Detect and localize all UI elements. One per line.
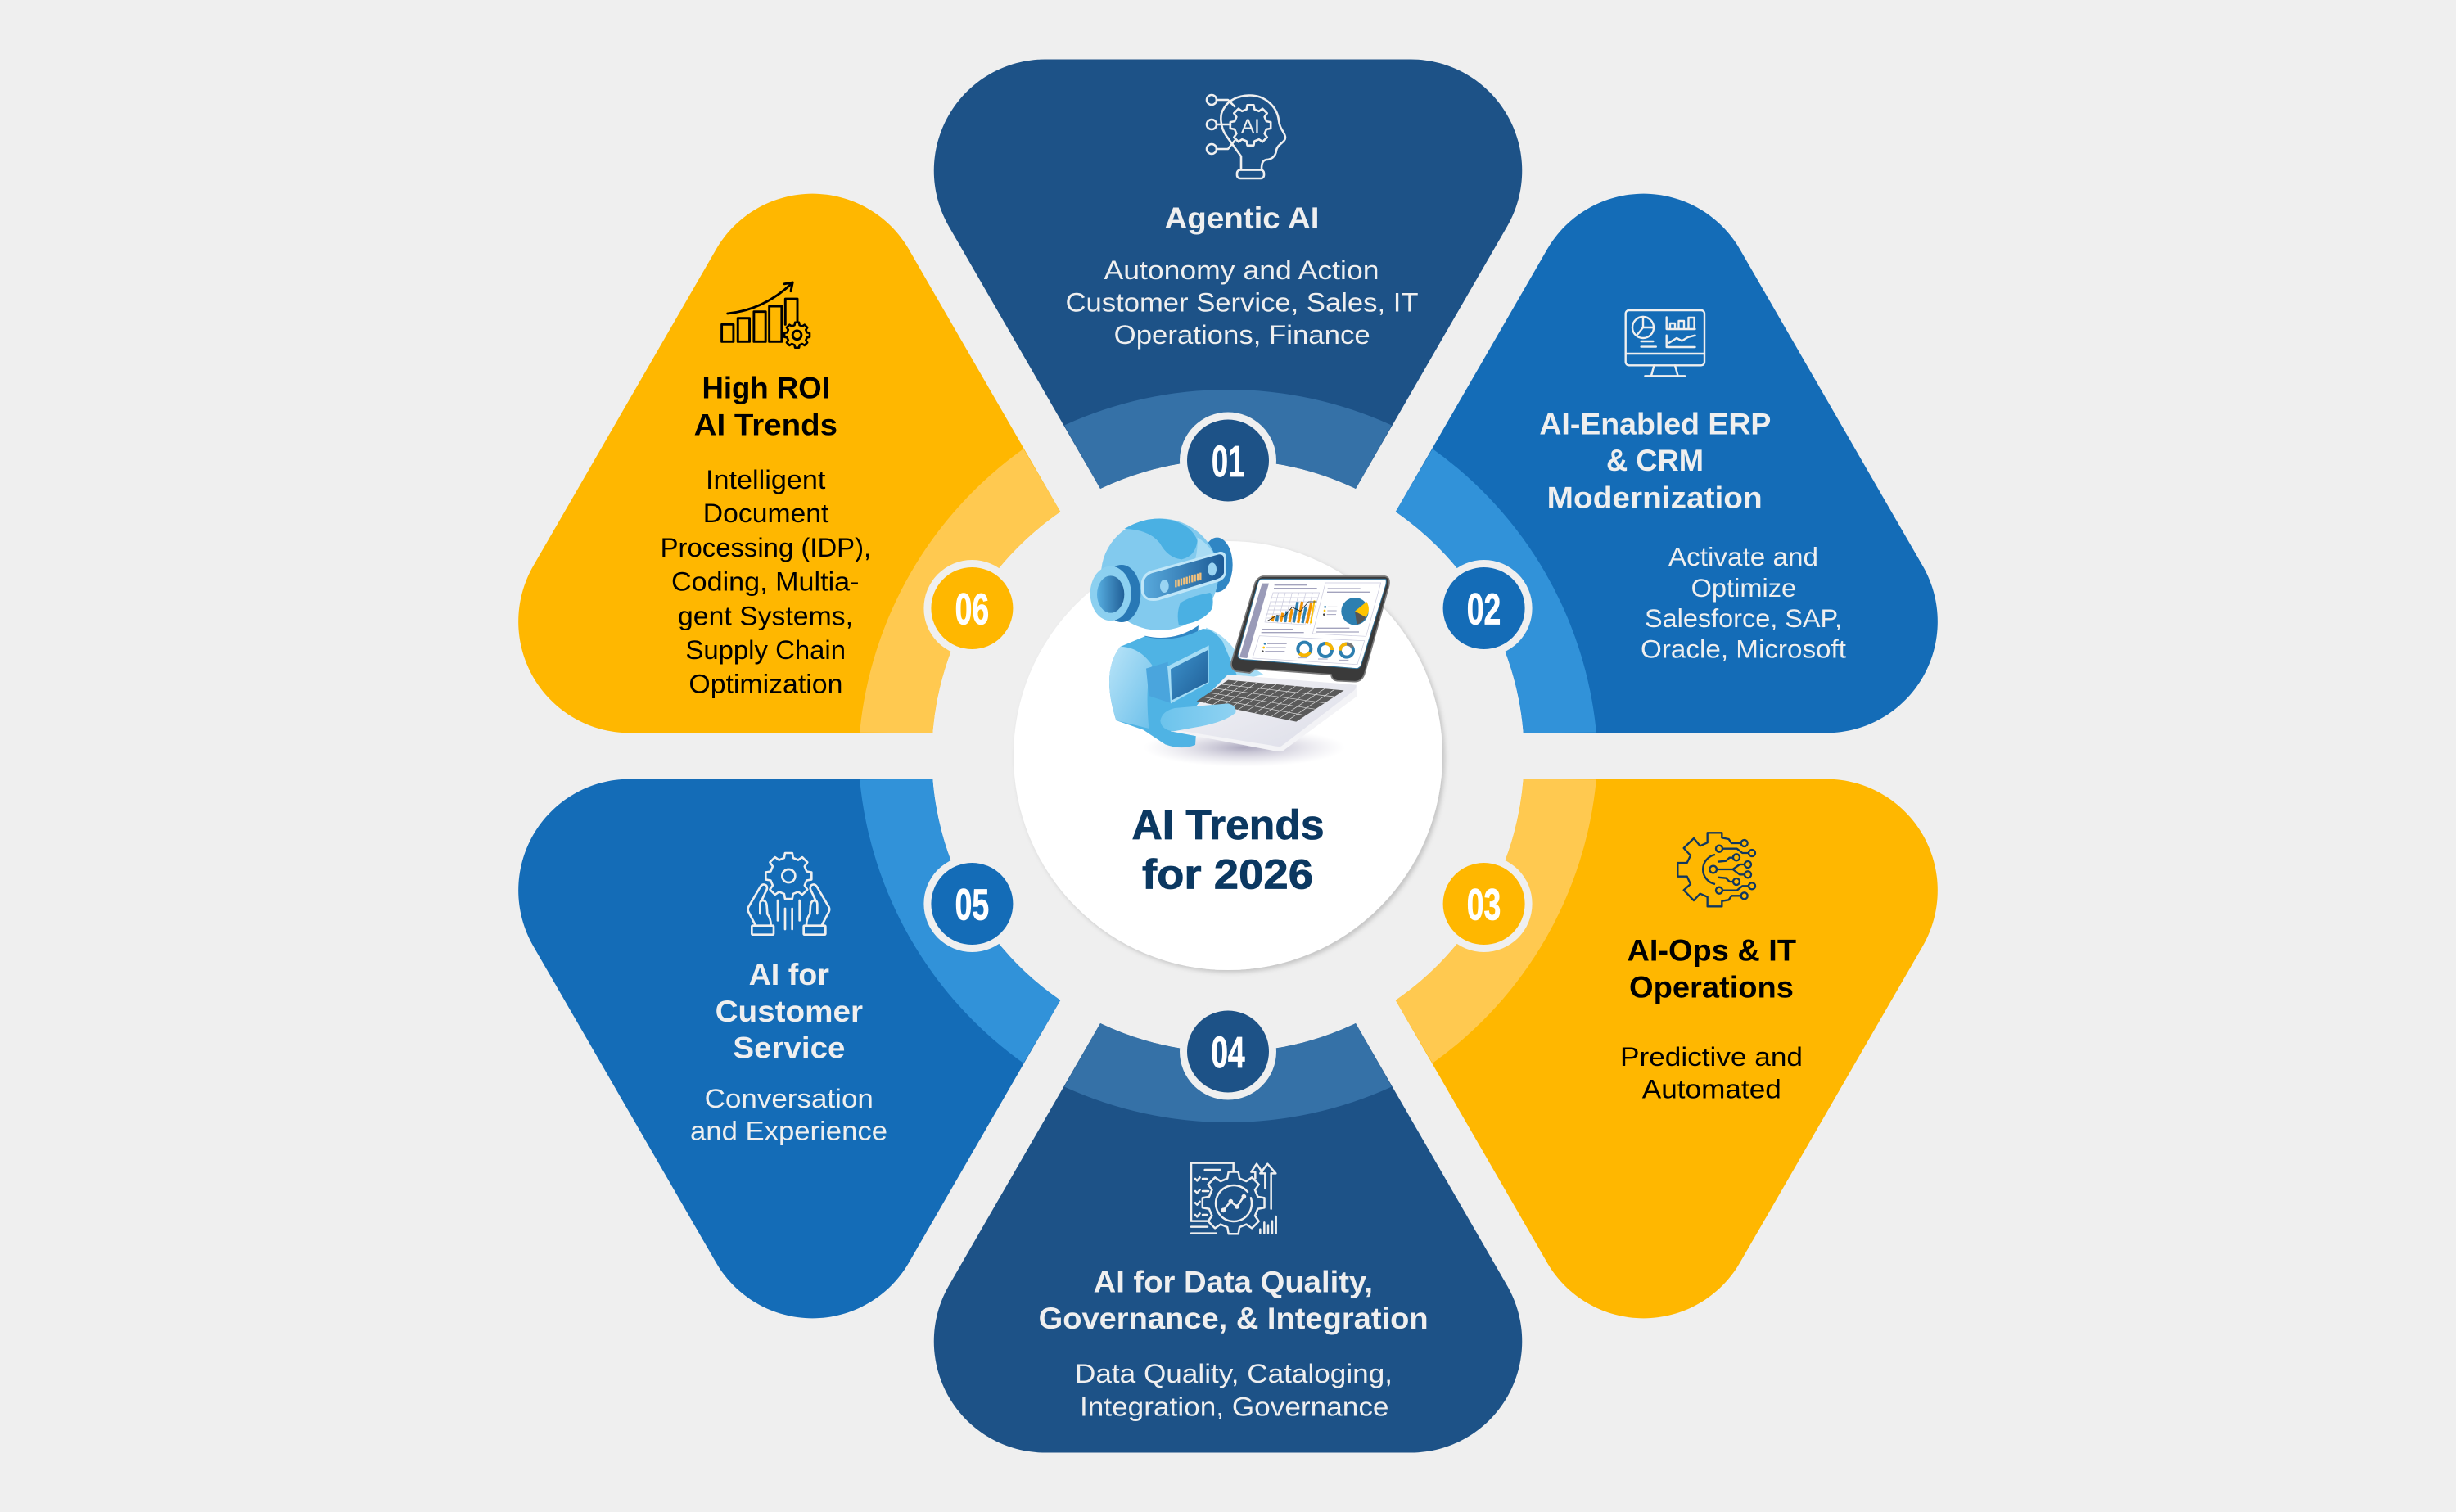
number badge 02 — [1436, 560, 1533, 657]
panel shape 04 — [934, 1023, 1522, 1452]
center illustration: robot with laptop — [1090, 518, 1389, 767]
description 06: Processing (IDP), — [661, 533, 871, 562]
robot torso — [1109, 629, 1238, 747]
center title — [1131, 801, 1325, 898]
inner arc band 02 — [1378, 431, 1628, 764]
description 06: gent Systems, — [678, 601, 853, 630]
heading 06: AI Trends — [694, 408, 837, 442]
description 02 — [1641, 542, 1846, 663]
description 02: Activate and — [1668, 542, 1818, 571]
center title: for 2026 — [1142, 851, 1313, 898]
icon: growth bars and gear — [722, 282, 810, 348]
heading 03: Operations — [1629, 970, 1794, 1004]
heading 06: High ROI — [702, 372, 830, 404]
heading 05: AI for — [749, 958, 829, 991]
panel 03: AI-Ops and IT Operations — [1312, 635, 1979, 1359]
heading 06 — [694, 372, 837, 442]
dashboard header lines — [1262, 585, 1370, 633]
panel shape 02 — [1312, 153, 1979, 877]
heading 04: Governance, & Integration — [1039, 1302, 1429, 1335]
robot arm on keyboard — [1160, 703, 1235, 731]
panel 06: High ROI AI Trends — [477, 153, 1144, 877]
panel shape 05 — [477, 635, 1144, 1359]
heading 05: Service — [733, 1031, 845, 1064]
dashboard donut panel — [1253, 636, 1365, 665]
dashboard pie panel — [1312, 583, 1381, 636]
laptop keyboard — [1197, 680, 1344, 722]
description 06: Intelligent — [706, 465, 825, 494]
heading 02 — [1539, 407, 1771, 514]
heading 03 — [1628, 933, 1796, 1004]
description 04 — [1075, 1359, 1393, 1421]
panel 04: AI for Data Quality, Governance and Integration — [934, 1004, 1522, 1452]
robot near ear — [1090, 565, 1140, 622]
description 01: Operations, Finance — [1114, 320, 1370, 350]
description 06: Coding, Multia- — [671, 566, 860, 596]
inner arc band 01 — [1064, 390, 1392, 489]
number badge 04: 04 — [1211, 1028, 1245, 1077]
icon: hands and gear — [748, 853, 829, 935]
heading 04: AI for Data Quality, — [1094, 1266, 1373, 1299]
heading 01: Agentic AI — [1164, 201, 1320, 235]
heading 02: AI-Enabled ERP — [1539, 407, 1771, 440]
robot neck — [1144, 625, 1199, 642]
icon: AI head: AI — [1241, 115, 1260, 138]
description 01: Autonomy and Action — [1104, 255, 1379, 285]
robot far ear — [1202, 538, 1233, 592]
description 02: Oracle, Microsoft — [1641, 634, 1846, 663]
center white circle — [1014, 541, 1442, 970]
heading 05: Customer — [716, 995, 863, 1028]
description 06: Optimization — [688, 669, 842, 698]
description 05: and Experience — [690, 1117, 887, 1146]
panel 02: AI-Enabled ERP and CRM Modernization — [1312, 153, 1979, 877]
ground shadow — [1144, 729, 1345, 767]
laptop screen — [1231, 576, 1389, 682]
number badge 02: 02 — [1467, 584, 1501, 634]
heading 05 — [716, 958, 863, 1064]
description 05 — [690, 1084, 887, 1146]
description 03 — [1620, 1042, 1803, 1104]
inner arc band 06 — [828, 431, 1078, 764]
laptop base — [1171, 675, 1357, 751]
icon: data quality gear — [1191, 1163, 1276, 1234]
icon: dashboard monitor — [1626, 310, 1704, 376]
icon: gear circuit — [1677, 833, 1755, 906]
center title: AI Trends — [1131, 801, 1325, 848]
heading 02: Modernization — [1547, 481, 1763, 514]
description 06: Document — [703, 499, 828, 528]
inner arc band 04 — [1064, 1023, 1392, 1122]
number badge 06: 06 — [955, 584, 989, 634]
description 01: Customer Service, Sales, IT — [1066, 288, 1419, 318]
sidebar — [1239, 584, 1269, 658]
number badge 05: 05 — [955, 881, 989, 930]
panel shape 03 — [1312, 635, 1979, 1359]
heading 03: AI-Ops & IT — [1628, 933, 1796, 967]
dashboard bar chart — [1265, 593, 1320, 625]
icon: AI head — [1207, 95, 1285, 178]
description 01 — [1066, 255, 1419, 350]
number badge 01 — [1180, 413, 1276, 509]
description 04: Data Quality, Cataloging, — [1075, 1359, 1393, 1388]
panel shape 06 — [477, 153, 1144, 877]
number badge 01: 01 — [1212, 437, 1244, 486]
panel 05: AI for Customer Service — [477, 635, 1144, 1359]
inner arc band 03 — [1378, 748, 1628, 1081]
description 04: Integration, Governance — [1080, 1392, 1388, 1421]
description 06: Supply Chain — [685, 635, 846, 665]
robot upper arm behind laptop — [1201, 628, 1263, 682]
description 06 — [661, 465, 871, 698]
description 03: Automated — [1642, 1075, 1781, 1104]
heading 02: & CRM — [1606, 444, 1704, 477]
robot head — [1101, 518, 1226, 630]
inner arc band 05 — [828, 748, 1078, 1081]
number badge 03: 03 — [1467, 881, 1501, 930]
number badge 06 — [923, 560, 1020, 657]
panel shape 01 — [934, 59, 1522, 489]
description 05: Conversation — [705, 1084, 874, 1113]
panel 01: Agentic AI — [934, 59, 1522, 509]
heading 04 — [1039, 1266, 1429, 1335]
description 02: Salesforce, SAP, — [1645, 603, 1842, 633]
number badge 04 — [1180, 1004, 1276, 1100]
description 02: Optimize — [1691, 573, 1796, 603]
description 03: Predictive and — [1620, 1042, 1803, 1072]
number badge 03 — [1436, 855, 1533, 952]
number badge 05 — [923, 855, 1020, 952]
